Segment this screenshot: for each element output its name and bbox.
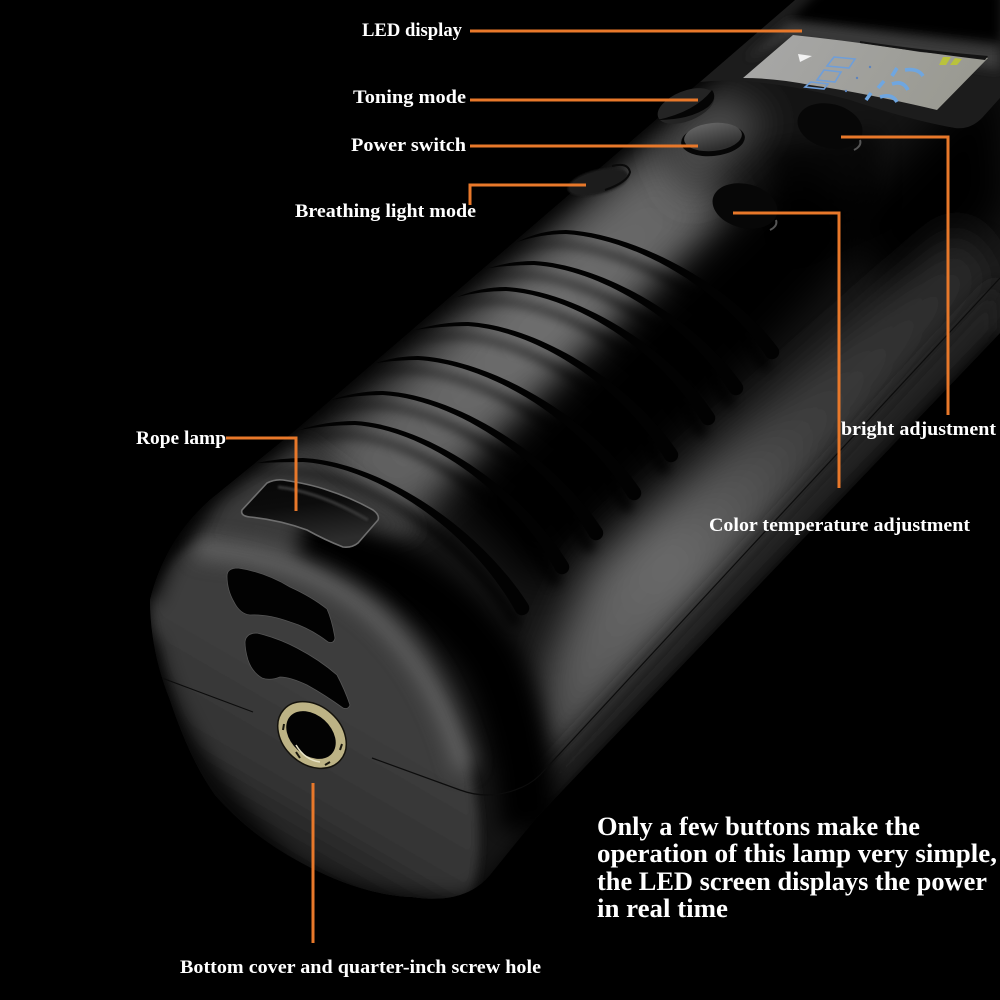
breathing button	[565, 163, 631, 201]
line: bright adjustment	[841, 137, 948, 415]
lamp body	[150, 0, 1000, 899]
housing shadow top	[790, 0, 1000, 42]
label: Power switch: Power switch	[351, 135, 466, 156]
line: rope lamp	[226, 438, 296, 511]
line: toning mode	[470, 98, 698, 102]
dark area right of buttons	[770, 130, 880, 250]
battery indicator	[939, 57, 962, 65]
description paragraph	[597, 812, 997, 923]
body shading	[150, 80, 1000, 899]
lower lit band	[538, 225, 1000, 782]
head housing	[700, 0, 1000, 128]
label: Bottom cover: Bottom cover and quarter-inch screw hole	[180, 957, 541, 978]
label: Rope lamp: Rope lamp	[136, 428, 226, 449]
head lit area	[660, 90, 770, 200]
LED screen	[743, 35, 988, 110]
lit body between grooves and rope slot	[194, 442, 410, 559]
mode boxes	[805, 57, 855, 89]
soft bottom edge	[145, 340, 1000, 908]
band past seam	[561, 302, 997, 754]
bright button	[793, 97, 867, 155]
ribbed grooves	[257, 230, 779, 615]
rim dark band	[300, 540, 530, 830]
dark middle band	[443, 186, 852, 579]
label: Breathing light mode: Breathing light mode	[295, 201, 476, 222]
description paragraph: in real time	[597, 894, 728, 923]
far right dark area	[868, 98, 1000, 279]
groove shadows	[249, 242, 771, 627]
slot inner light	[278, 487, 368, 520]
readout dots	[845, 66, 871, 92]
seam lines	[162, 278, 1000, 795]
power button	[680, 120, 746, 159]
rim highlight	[195, 548, 466, 770]
housing light	[745, 22, 1000, 70]
screw hole	[264, 688, 360, 782]
colour temperature button	[708, 177, 782, 235]
line: power switch	[470, 144, 698, 148]
orange leader lines	[226, 31, 948, 943]
display head	[700, 0, 1000, 128]
line: breathing light mode	[470, 185, 586, 205]
label: Color temperature adjustment: Color temperature adjustment	[709, 515, 971, 536]
line: bottom cover	[312, 783, 314, 943]
description paragraph: the LED screen displays the power	[597, 867, 987, 896]
description paragraph: operation of this lamp very simple,	[597, 839, 997, 868]
line: LED display	[470, 30, 802, 32]
screen top bezel	[860, 41, 988, 60]
toning button	[653, 81, 719, 131]
description paragraph: Only a few buttons make the	[597, 812, 920, 841]
play icon	[798, 54, 812, 62]
rope lamp slot	[242, 480, 378, 547]
cap face	[150, 540, 479, 905]
soft top edge	[150, 81, 718, 608]
line: colour temperature adjustment	[733, 213, 839, 488]
label: LED display: LED display	[362, 20, 462, 41]
label: bright adjustment: bright adjustment	[841, 419, 997, 440]
upper lit band	[300, 140, 735, 530]
label: Toning mode: Toning mode	[353, 87, 466, 108]
readout values	[866, 68, 923, 102]
cap vents	[227, 568, 350, 709]
